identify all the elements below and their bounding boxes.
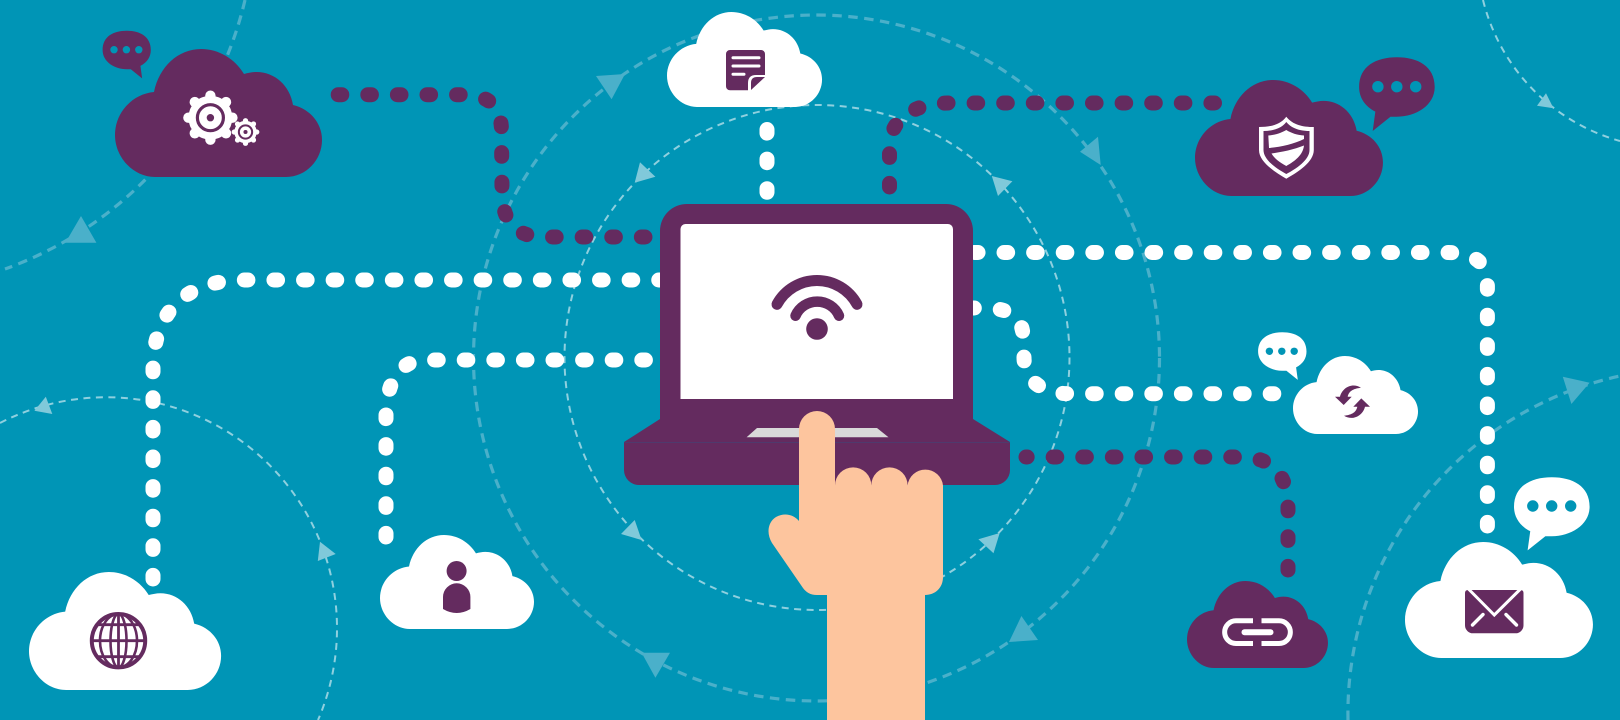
connector: mail cloud to laptop bbox=[960, 252, 1487, 526]
connector: shield cloud to laptop bbox=[890, 103, 1214, 220]
cloud body bbox=[1195, 80, 1383, 196]
cloud: document bbox=[667, 12, 822, 107]
speech bubble: gears cloud bbox=[103, 31, 151, 78]
cloud: globe bbox=[29, 572, 221, 690]
laptop base seam bbox=[624, 442, 1010, 444]
connector: person cloud to laptop bbox=[386, 360, 660, 537]
icon: large gear bbox=[183, 90, 238, 145]
orbit arrowheads, outer bbox=[65, 74, 1590, 678]
top-right orbit arc bbox=[1483, 0, 1620, 141]
speech bubble: sync cloud bbox=[1258, 332, 1306, 380]
orbit arrowheads, inner bbox=[34, 93, 1553, 561]
icon: person bbox=[443, 561, 470, 613]
cloud body bbox=[380, 535, 534, 629]
cloud body bbox=[667, 12, 822, 107]
laptop lid and base bbox=[624, 204, 1010, 485]
icon: envelope bbox=[1465, 588, 1524, 633]
pointing hand bbox=[769, 411, 943, 720]
laptop bbox=[624, 204, 1010, 485]
cloud body bbox=[115, 49, 322, 177]
cloud body bbox=[1405, 542, 1593, 658]
trackpad bbox=[747, 428, 888, 437]
icon: chain link bbox=[1225, 621, 1290, 644]
bottom-left orbit arc bbox=[0, 397, 337, 720]
bottom-right orbit arc bbox=[1348, 376, 1620, 720]
icon: small gear bbox=[232, 118, 259, 146]
cloud body bbox=[1187, 581, 1328, 668]
top-left orbit arc bbox=[5, 0, 245, 269]
connector: gears cloud to laptop bbox=[338, 95, 660, 237]
cloud: person bbox=[380, 535, 534, 629]
cloud: link bbox=[1187, 581, 1328, 668]
icon: document bbox=[726, 50, 765, 90]
connector: sync cloud to laptop bbox=[960, 308, 1274, 394]
inner orbit ring bbox=[564, 105, 1070, 610]
icon: sync arrows bbox=[1335, 386, 1370, 418]
connector: link cloud to laptop bbox=[1026, 457, 1288, 570]
icon: shield bbox=[1259, 117, 1314, 179]
cloud body bbox=[29, 572, 221, 690]
icon: wifi bbox=[777, 280, 857, 340]
cloud body bbox=[1293, 356, 1418, 434]
icon: globe bbox=[92, 614, 145, 667]
cloud: security shield bbox=[1195, 80, 1383, 196]
cloud: sync bbox=[1293, 356, 1418, 434]
cloud: mail bbox=[1405, 542, 1593, 658]
dotted connection lines bbox=[153, 95, 1487, 579]
cloud: gears bbox=[115, 49, 322, 177]
connector: document cloud to laptop bbox=[760, 130, 774, 195]
speech bubble: shield cloud bbox=[1359, 57, 1435, 131]
connector: globe cloud to laptop bbox=[153, 280, 670, 579]
speech bubble: mail cloud bbox=[1514, 477, 1590, 550]
laptop screen bbox=[680, 224, 953, 399]
outer orbit ring bbox=[474, 15, 1160, 701]
